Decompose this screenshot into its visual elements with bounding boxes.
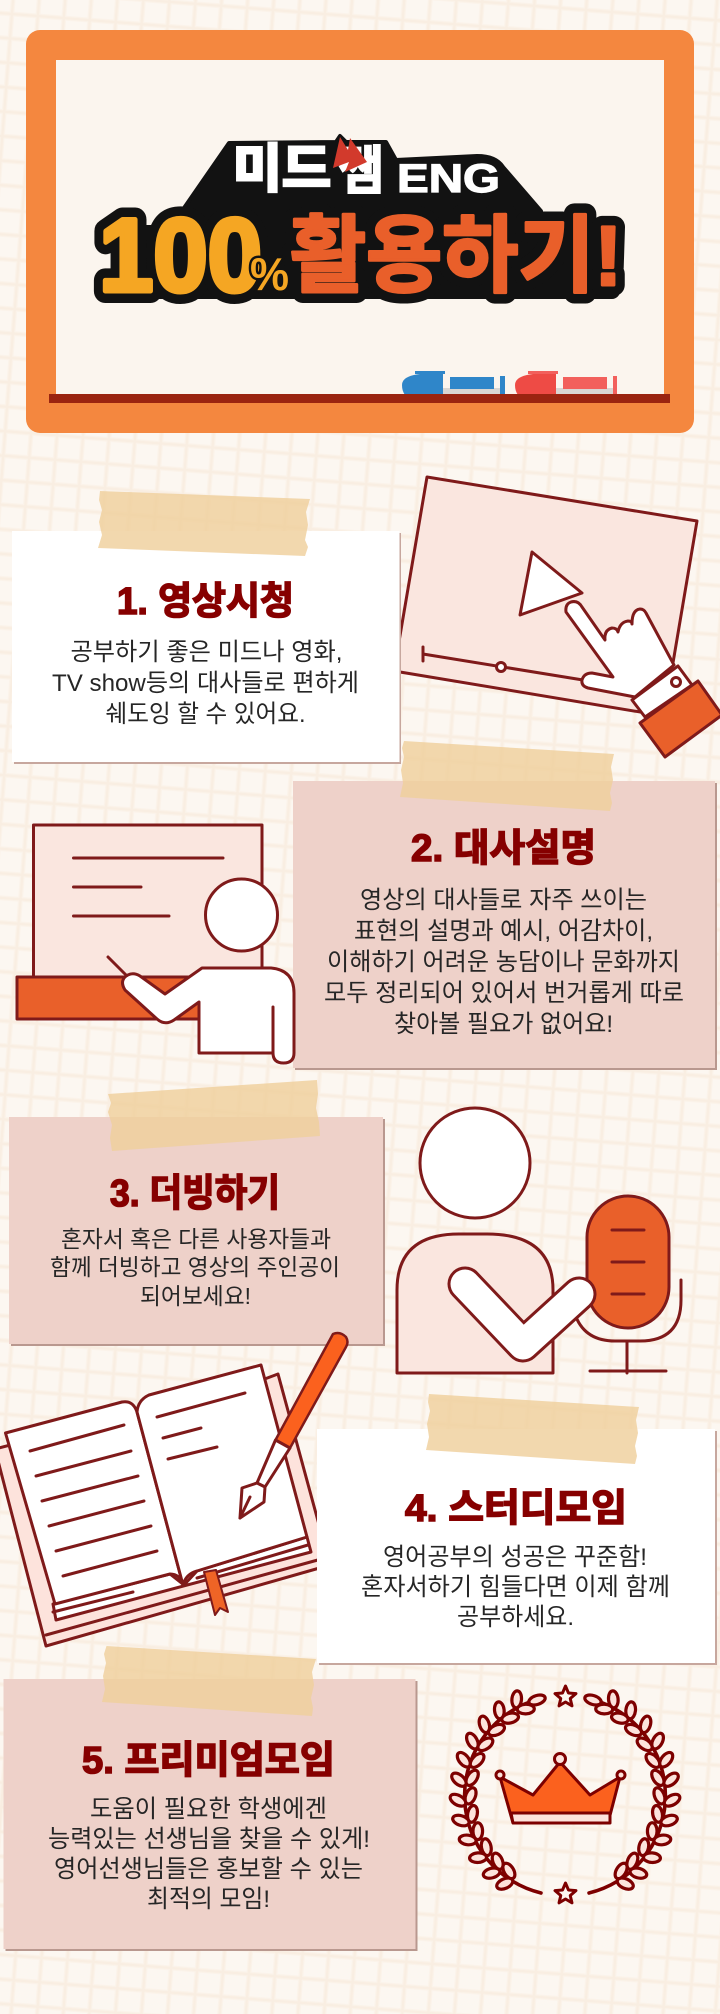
play triangle	[520, 552, 582, 615]
board	[34, 825, 262, 980]
text block: step 5: 최적의 모임!	[147, 1885, 270, 1913]
tape: step 5	[102, 1646, 316, 1716]
panel: whiteboard header	[26, 30, 694, 433]
icon: red marker	[515, 371, 617, 395]
cover edge line	[46, 1558, 325, 1635]
icon: pointing hand	[566, 602, 720, 757]
logo headline text	[99, 198, 622, 314]
heading: step 5: 5. 프리미엄모임	[82, 1740, 335, 1782]
text block: step 4: 영어공부의 성공은 꾸준함!	[383, 1543, 647, 1571]
shirt cuff	[632, 666, 692, 717]
whiteboard surface	[56, 60, 664, 395]
progress bar	[423, 647, 583, 680]
logo headline text: 100	[99, 198, 262, 314]
arm	[465, 1284, 579, 1345]
text block: step 3: 되어보세요!	[140, 1283, 251, 1309]
text block: step 3	[50, 1226, 340, 1309]
top star	[555, 1686, 576, 1706]
text block: step 5: 능력있는 선생님을 찾을 수 있게!	[48, 1825, 370, 1853]
illustration: open book	[0, 1365, 330, 1646]
text block: step 5	[48, 1795, 370, 1913]
tape: step 1	[98, 491, 310, 556]
panel: step 3	[9, 1117, 385, 1346]
illustration: teacher at board	[17, 825, 294, 1063]
logo headline text: 100	[99, 198, 262, 314]
right laurel branch	[584, 1685, 683, 1896]
sleeve	[640, 681, 720, 757]
whiteboard frame	[26, 30, 694, 433]
teacher body	[122, 968, 294, 1063]
text block: step 4: 공부하세요.	[457, 1603, 574, 1631]
text block: step 2: 이해하기 어려운 농담이나 문화까지	[327, 948, 680, 976]
left page	[6, 1402, 183, 1604]
microphone	[587, 1196, 669, 1328]
board text lines	[74, 858, 223, 916]
torso	[397, 1234, 553, 1373]
bookmark	[204, 1570, 228, 1615]
text block: step 3: 함께 더빙하고 영상의 주인공이	[50, 1254, 340, 1280]
panel: step 4	[317, 1429, 717, 1665]
heading: step 3: 3. 더빙하기	[110, 1173, 280, 1215]
logo black backing	[184, 136, 541, 250]
cuff button	[672, 678, 680, 686]
text block: step 2: 찾아볼 필요가 없어요!	[394, 1010, 613, 1038]
logo headline text: 활용하기!	[290, 209, 622, 303]
text block: step 2: 모두 정리되어 있어서 번거롭게 따로	[324, 979, 684, 1007]
illustration: video screen	[394, 477, 697, 716]
text block: step 1: TV show등의 대사들로 편하게	[52, 669, 359, 697]
panel: step 2	[293, 781, 717, 1070]
icon: red arrows	[333, 137, 367, 172]
back cover	[0, 1374, 330, 1646]
heading: step 2: 2. 대사설명	[411, 828, 596, 870]
pen nib	[240, 1483, 265, 1518]
panel: step 5	[4, 1679, 418, 1951]
title logo	[99, 136, 622, 314]
text block: step 2: 표현의 설명과 예시, 어감차이,	[354, 917, 653, 945]
pointer stick	[108, 957, 126, 975]
teacher head	[206, 879, 278, 951]
text block: step 2: 영상의 대사들로 자주 쓰이는	[360, 886, 647, 914]
logo subtitle text	[233, 141, 500, 201]
heading: step 4: 4. 스터디모임	[405, 1488, 627, 1530]
arm line	[272, 1007, 274, 1053]
tape: step 3	[108, 1080, 320, 1151]
hand	[566, 602, 674, 697]
orange ledge	[17, 977, 207, 1019]
text block: step 4: 혼자서하기 힘들다면 이제 함께	[361, 1573, 670, 1601]
head	[420, 1108, 530, 1218]
illustration: person with microphone	[397, 1108, 681, 1373]
tape: step 4	[426, 1394, 639, 1464]
text block: step 5: 영어선생님들은 홍보할 수 있는	[54, 1855, 363, 1883]
logo subtitle text: 미드	[233, 141, 331, 199]
left page text lines	[30, 1425, 157, 1576]
right page text lines	[157, 1393, 245, 1459]
logo headline text: %	[250, 248, 289, 300]
text block: step 5: 도움이 필요한 학생에겐	[90, 1795, 327, 1823]
tape: step 2	[400, 741, 614, 811]
text block: step 3: 혼자서 혹은 다른 사용자들과	[61, 1226, 331, 1252]
pen grip	[257, 1440, 290, 1487]
left laurel branch	[447, 1685, 546, 1896]
logo black band behind headline	[112, 225, 620, 299]
video frame	[394, 477, 697, 716]
right page	[137, 1365, 307, 1585]
logo headline text: 활용하기!	[290, 209, 622, 303]
icon: blue marker	[402, 371, 505, 395]
text block: step 4	[361, 1543, 670, 1631]
panel: step 1	[12, 531, 401, 764]
heading: step 1: 1. 영상시청	[117, 581, 294, 623]
page stack lines	[53, 1545, 308, 1612]
logo subtitle text: ENG	[397, 157, 500, 201]
page stack	[53, 1537, 311, 1620]
text block: step 1: 공부하기 좋은 미드나 영화,	[70, 638, 342, 666]
whiteboard tray	[49, 394, 670, 403]
text block: step 1: 쉐도잉 할 수 있어요.	[106, 700, 306, 728]
text block: step 1	[52, 638, 359, 728]
crown	[496, 1754, 625, 1823]
icon: laurel wreath with crown	[447, 1685, 683, 1903]
microphone stand	[576, 1280, 681, 1373]
bottom star	[555, 1883, 576, 1903]
text block: step 2	[324, 886, 684, 1038]
icon: fountain pen	[240, 1333, 348, 1518]
logo subtitle text: 쌤	[339, 143, 383, 201]
pen barrel	[276, 1333, 348, 1448]
